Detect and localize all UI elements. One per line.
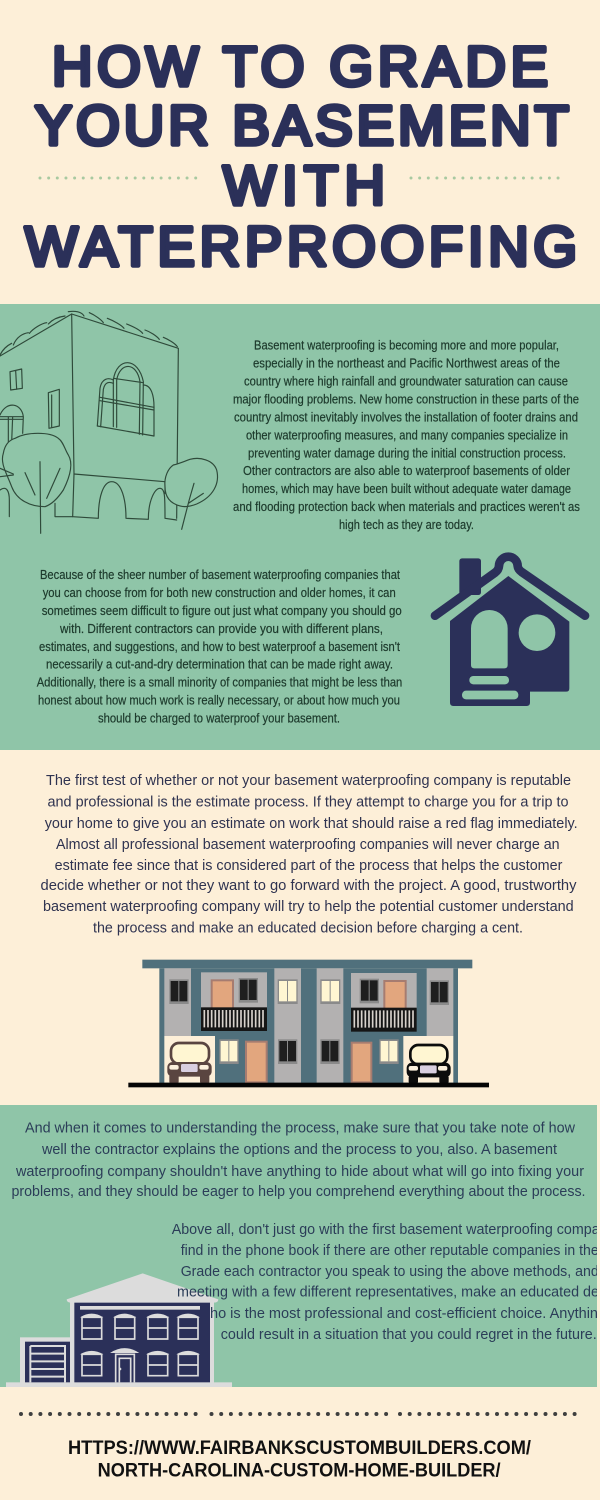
text block: intro paragraph two: you can choose from for both new construction and older homes, it can bbox=[43, 586, 396, 600]
icon: navy house bbox=[435, 557, 585, 706]
title bbox=[25, 34, 577, 278]
text block: intro paragraph two: honest about how much work is really necessary, or about how much you bbox=[38, 693, 400, 707]
title: WATERPROOFING bbox=[25, 214, 577, 278]
text block: final advice bbox=[172, 1221, 600, 1343]
title dotted dividers bbox=[40, 176, 566, 180]
text block: explaining the process: And when it comes to understanding the process, make sure that you take note of how bbox=[25, 1120, 575, 1137]
icon: duplex apartment building with cars bbox=[128, 960, 489, 1087]
text block: estimate process: decide whether or not they want to go forward with the project. A good, trustworthy bbox=[40, 877, 577, 894]
text block: intro paragraph one: country where high rainfall and groundwater saturation can cause bbox=[244, 374, 568, 388]
title: HOW TO GRADE bbox=[52, 34, 548, 98]
icon: navy colonial house with garage bbox=[6, 1273, 232, 1387]
footer url: HTTPS://WWW.FAIRBANKSCUSTOMBUILDERS.COM/ bbox=[68, 1438, 532, 1459]
doors bbox=[212, 980, 406, 1082]
text block: estimate process: and professional is the estimate process. If they attempt to charge you for a trip to bbox=[48, 794, 568, 811]
text block: intro paragraph two: with. Different contractors can provide you with different plans, bbox=[59, 622, 383, 636]
text block: estimate process: estimate fee since that is considered part of the process that helps the customer bbox=[55, 857, 562, 874]
text block: final advice: ho is the most professional and cost-efficient choice. Anythin bbox=[210, 1305, 598, 1322]
text block: intro paragraph two: sometimes seem difficult to figure out just what company you should go bbox=[42, 604, 402, 618]
footer url: NORTH-CAROLINA-CUSTOM-HOME-BUILDER/ bbox=[98, 1460, 501, 1482]
panel: introduction bbox=[0, 304, 600, 750]
building body bbox=[142, 960, 472, 1083]
text block: intro paragraph two: Because of the sheer number of basement waterproofing companies that bbox=[40, 568, 400, 582]
text block: explaining the process: well the contractor explains the options and the process to you, also. A basement bbox=[41, 1141, 558, 1158]
text block: intro paragraph two: necessarily a cut-and-dry determination that can be made right away. bbox=[46, 658, 393, 672]
panel: understanding the process bbox=[0, 1105, 597, 1387]
text block: estimate process: The first test of whether or not your basement waterproofing company is reputable bbox=[46, 772, 571, 789]
text block: intro paragraph one: preventing water damage during the initial construction process. bbox=[248, 446, 566, 460]
text block: estimate process: the process and make an educated decision before charging a cent. bbox=[93, 919, 523, 936]
car: brown bbox=[167, 1043, 212, 1083]
icon: sketched building with trees bbox=[0, 311, 217, 533]
text block: intro paragraph two: Additionally, there is a small minority of companies that might be less than bbox=[37, 676, 402, 690]
balconies bbox=[201, 1007, 417, 1032]
text block: estimate process: your home to give you an estimate on work that should raise a red flag immediately. bbox=[45, 815, 578, 832]
text block: intro paragraph two bbox=[37, 568, 402, 725]
text block: explaining the process: problems, and they should be eager to help you comprehend everything about the process. bbox=[12, 1183, 586, 1200]
text block: intro paragraph one: Other contractors are also able to waterproof basements of older bbox=[243, 464, 570, 478]
footer url bbox=[68, 1438, 532, 1482]
title: YOUR BASEMENT bbox=[35, 94, 569, 157]
text block: intro paragraph one: especially in the northeast and Pacific Northwest areas of the bbox=[253, 356, 560, 370]
text block: intro paragraph one bbox=[233, 338, 580, 532]
text block: intro paragraph one: Basement waterproofing is becoming more and more popular, bbox=[254, 338, 559, 352]
text block: estimate process: basement waterproofing company will try to help the potential customer understand bbox=[43, 898, 574, 915]
text block: estimate process bbox=[40, 772, 578, 936]
text block: intro paragraph two: estimates, and suggestions, and how to best waterproof a basement isn't bbox=[39, 640, 400, 654]
text block: intro paragraph two: should be charged to waterproof your basement. bbox=[98, 711, 340, 725]
text block: intro paragraph one: other waterproofing measures, and many companies specialize in bbox=[246, 428, 568, 442]
windows bbox=[169, 978, 449, 1064]
text block: explaining the process bbox=[12, 1120, 586, 1200]
footer dotted divider bbox=[21, 1412, 576, 1416]
text block: estimate process: Almost all professional basement waterproofing companies will never charge an bbox=[56, 836, 560, 853]
text block: explaining the process: waterproofing company shouldn't have anything to hide about what will go into fixing your bbox=[15, 1163, 584, 1180]
ground line bbox=[128, 1083, 489, 1087]
car: black bbox=[407, 1045, 451, 1083]
title: WITH bbox=[223, 154, 385, 217]
text block: intro paragraph one: high tech as they are today. bbox=[339, 518, 474, 532]
